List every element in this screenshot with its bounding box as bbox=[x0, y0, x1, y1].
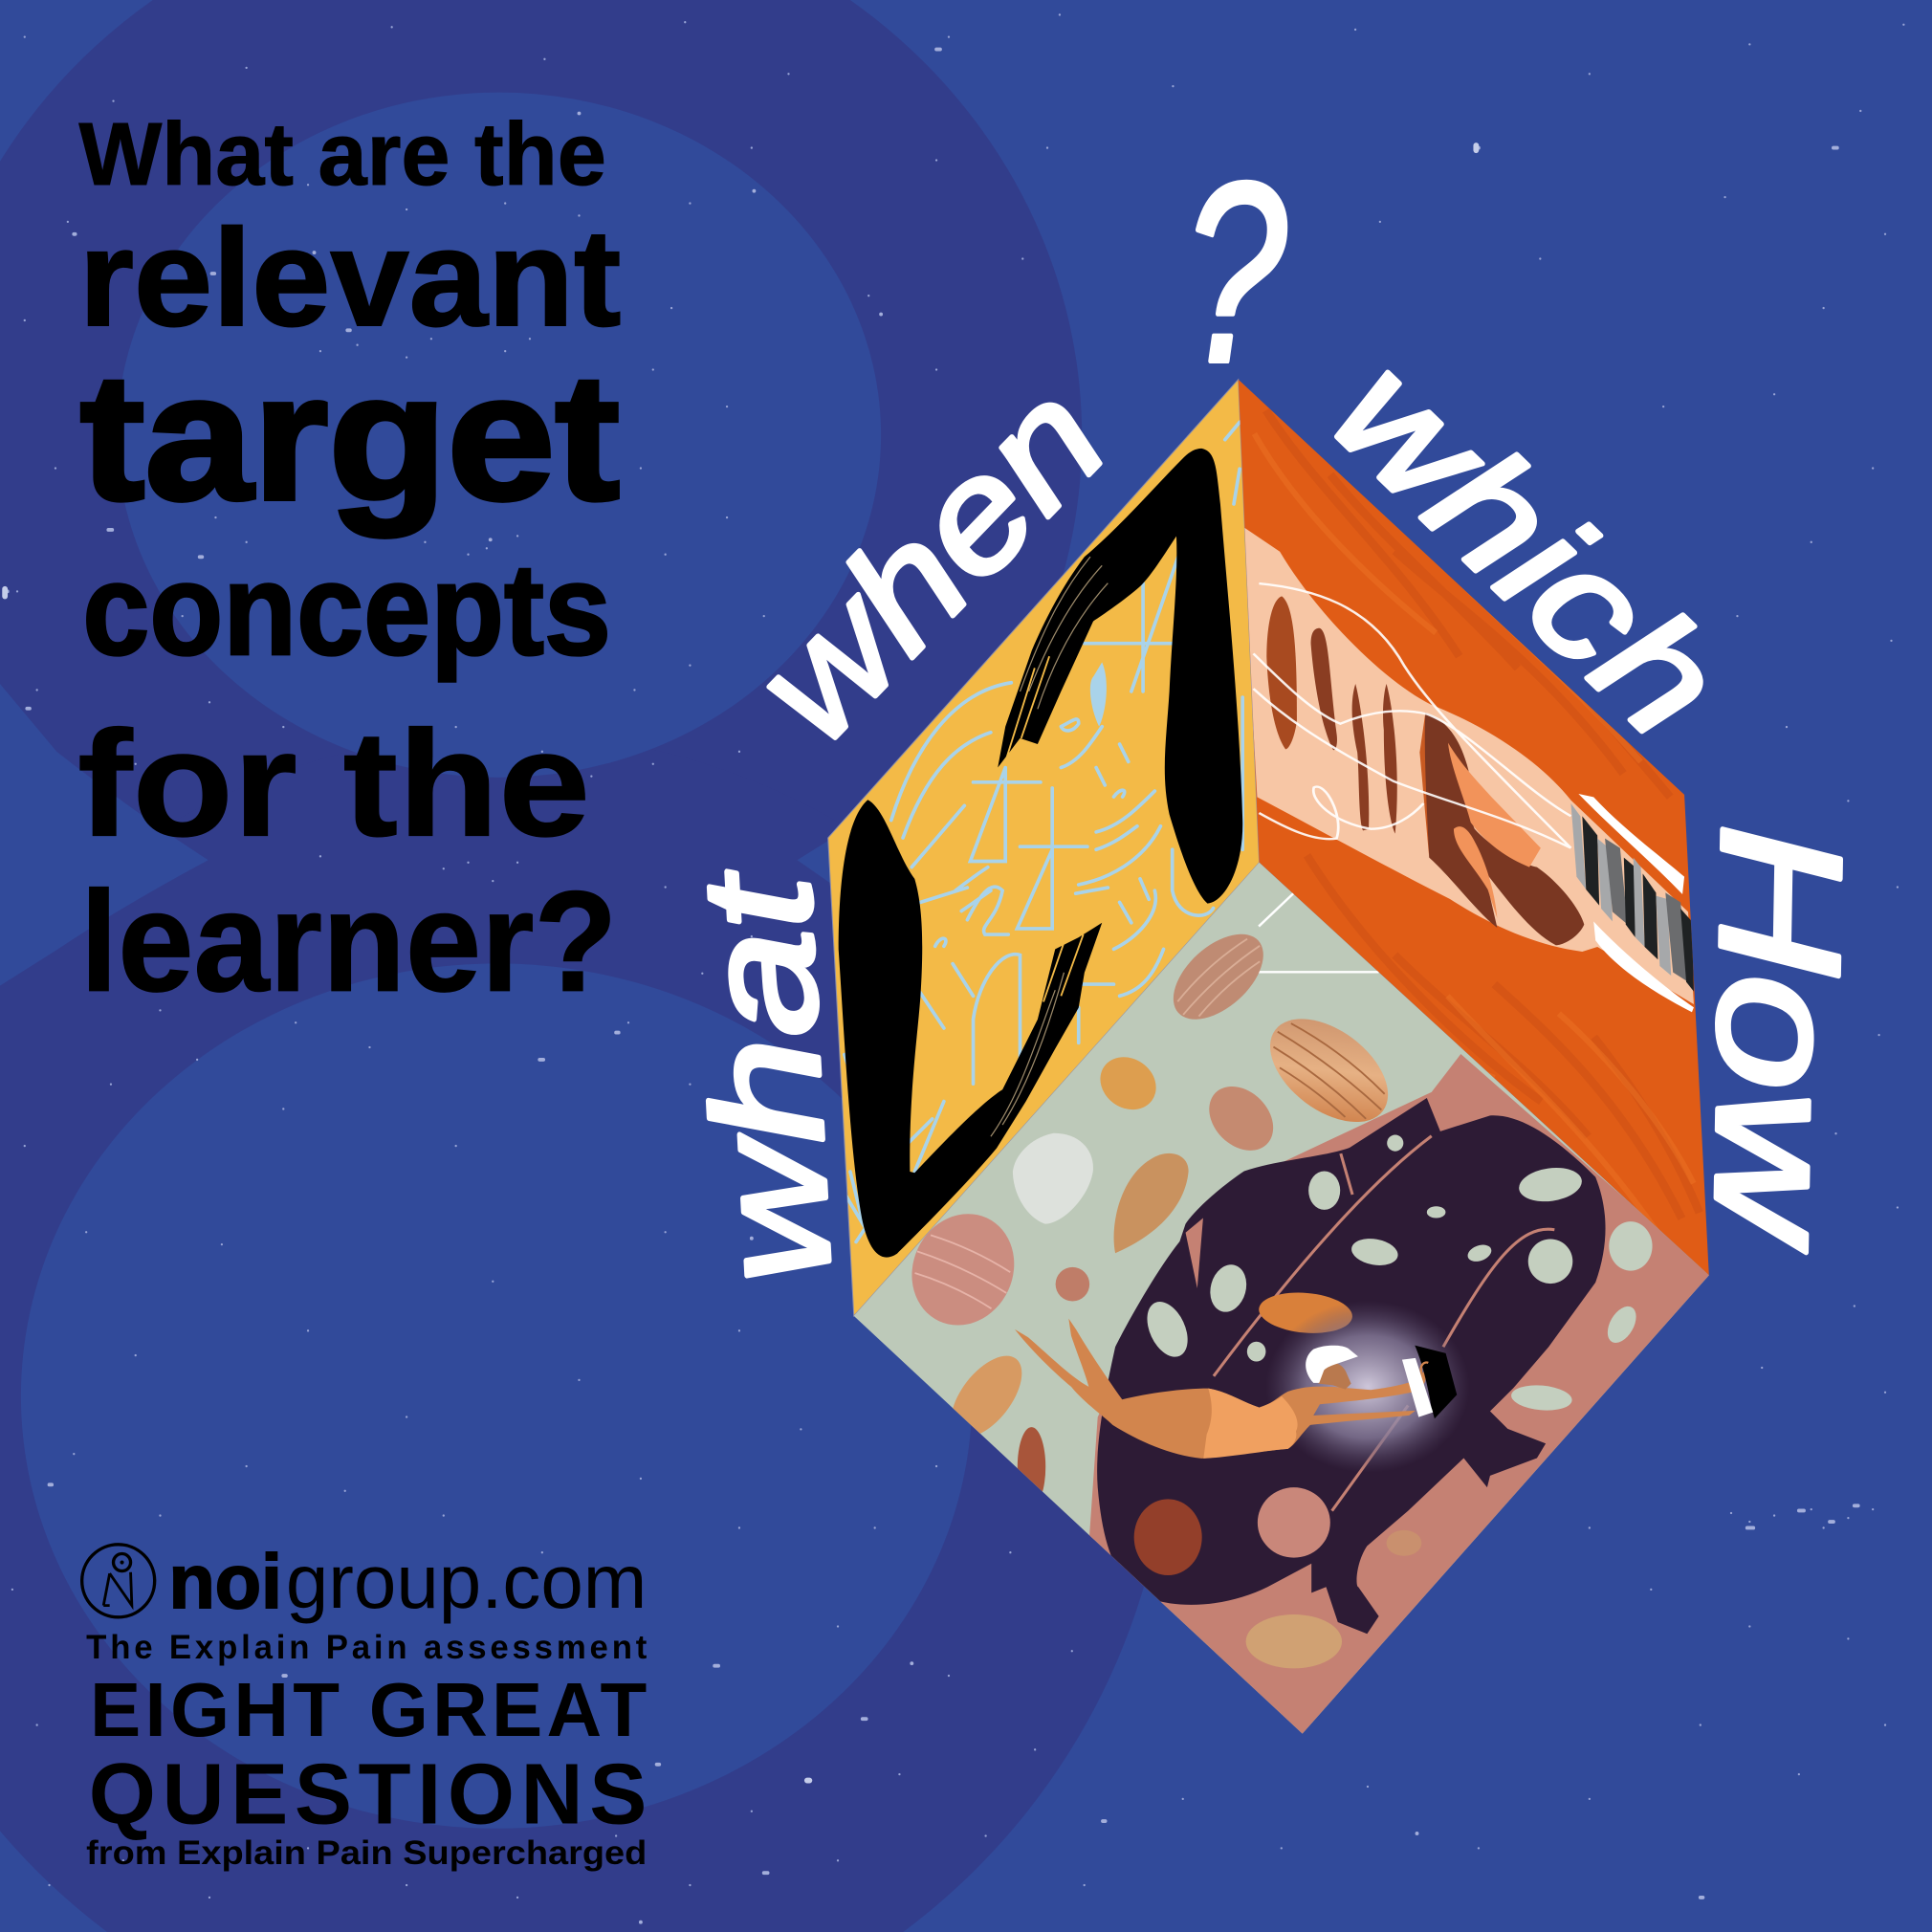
word: When: When bbox=[720, 352, 1138, 776]
stones on sage bbox=[894, 918, 1407, 1506]
subtitle: The Explain Pain assessment: The Explain Pain assessment bbox=[86, 1630, 648, 1666]
title: EIGHT GREAT: EIGHT GREAT bbox=[90, 1667, 647, 1752]
chalk pattern bbox=[839, 375, 1242, 1242]
background: lower inner disc bbox=[21, 963, 972, 1829]
brush texture bbox=[1266, 410, 1700, 1218]
word: which: which bbox=[1302, 324, 1754, 770]
finger lines bbox=[991, 557, 1108, 1136]
tablet bbox=[1415, 1346, 1457, 1418]
word: How: How bbox=[1678, 823, 1877, 1254]
background ring: lower figure eight loop bbox=[0, 733, 1171, 1932]
cube face: sage and pink with seated figure bbox=[854, 863, 1713, 1736]
orange diving figure bbox=[1015, 1319, 1426, 1459]
logo wordmark: group.com bbox=[286, 1539, 647, 1624]
stripes in beam bbox=[1266, 596, 1297, 749]
white bands bbox=[1578, 794, 1684, 894]
heading: target concepts question: concepts bbox=[82, 536, 611, 682]
background: left and right notches between loops bbox=[0, 684, 863, 986]
heading: target concepts question: What are the bbox=[78, 104, 606, 204]
dark robed body bbox=[1097, 1098, 1606, 1634]
pink seams bbox=[1214, 1136, 1554, 1511]
white swirl lines bbox=[1253, 583, 1570, 848]
swimsuit torso bbox=[1203, 1389, 1298, 1459]
heading: target concepts question: learner? bbox=[80, 862, 617, 1021]
light beam bbox=[1242, 526, 1694, 1004]
logo wordmark: noi bbox=[168, 1539, 282, 1624]
cube face: orange with light beam bbox=[1239, 380, 1709, 1275]
word: What: What bbox=[670, 866, 864, 1291]
footer: noigroup branding and series title bbox=[82, 1539, 648, 1872]
background ring: upper figure eight loop bbox=[0, 0, 1082, 982]
white floor lines bbox=[1253, 893, 1379, 972]
cube face: yellow with black arms bbox=[828, 375, 1260, 1316]
heading: target concepts question: target bbox=[80, 337, 620, 538]
icon: noigroup logo bbox=[82, 1545, 155, 1617]
grey piano keys bbox=[1570, 803, 1694, 992]
heading: target concepts question bbox=[77, 104, 621, 1021]
title: QUESTIONS: QUESTIONS bbox=[89, 1746, 647, 1843]
background: upper inner disc bbox=[117, 93, 881, 778]
heading: target concepts question: relevant bbox=[78, 200, 621, 355]
sage patches bbox=[1139, 1135, 1653, 1413]
question mark: ? bbox=[1183, 128, 1287, 415]
source line: from Explain Pain Supercharged bbox=[86, 1835, 647, 1872]
black arm upper bbox=[998, 449, 1242, 904]
black arm lower bbox=[839, 800, 1102, 1258]
head with white hair bbox=[1318, 1362, 1351, 1390]
pink ground bbox=[1089, 1054, 1713, 1736]
terracotta stones on body bbox=[1259, 1293, 1352, 1333]
isometric cube illustration bbox=[828, 375, 1713, 1736]
tablet glow bbox=[1272, 1306, 1463, 1469]
heading: target concepts question: for the bbox=[77, 700, 590, 867]
brown boot shape bbox=[1419, 713, 1429, 858]
